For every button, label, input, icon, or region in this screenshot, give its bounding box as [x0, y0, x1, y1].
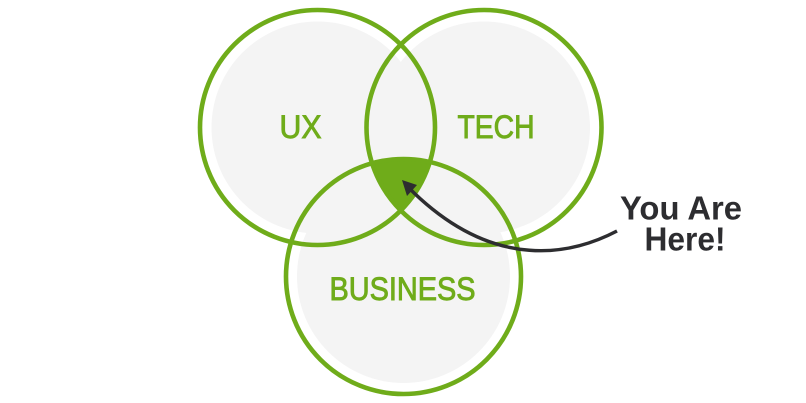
callout: You Are Here!: Here!	[644, 220, 726, 258]
label: TECH: TECH	[458, 109, 534, 145]
label: BUSINESS: BUSINESS	[330, 271, 476, 307]
callout: You Are Here!: You Are	[620, 190, 742, 226]
callout: You Are Here!	[620, 190, 742, 258]
circle outlines	[200, 10, 602, 394]
panel: circle fills	[212, 22, 590, 383]
label: UX: UX	[280, 109, 322, 145]
arrow: pointing to intersection	[402, 180, 617, 251]
highlighted intersection	[372, 158, 430, 210]
